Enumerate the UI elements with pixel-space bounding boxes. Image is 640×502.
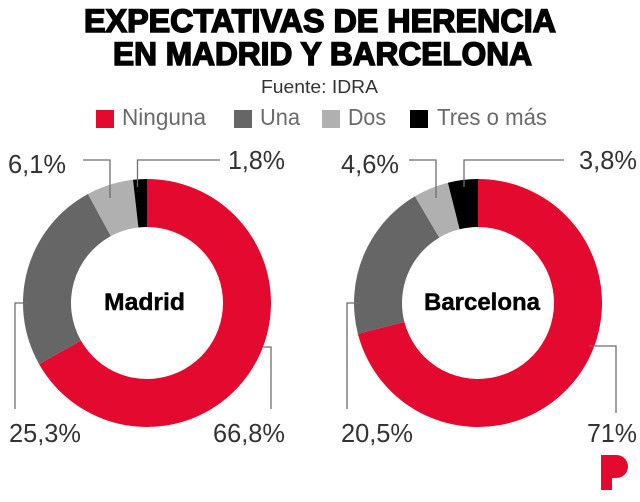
legend item: Una xyxy=(234,104,300,130)
source: Fuente: IDRA xyxy=(261,77,378,97)
legend item: Tres o más: Tres o más xyxy=(437,104,547,130)
title: EXPECTATIVAS DE HERENCIA xyxy=(84,3,556,39)
value labels: Madrid xyxy=(8,145,285,448)
segment: Una 20,5% xyxy=(354,196,439,334)
value labels: Madrid: 1,8% xyxy=(228,145,285,175)
segment: Tres o más 1,8% xyxy=(133,179,147,227)
segment: Ninguna 71% xyxy=(358,179,602,427)
segment: Ninguna 66,8% xyxy=(39,179,271,427)
legend item: Dos xyxy=(322,104,386,130)
donut chart: Madrid xyxy=(23,179,271,427)
segment: Dos 6,1% xyxy=(88,180,138,236)
legend item: Ninguna: Ninguna xyxy=(122,104,206,130)
value labels: Barcelona: 3,8% xyxy=(579,145,637,175)
value labels: Barcelona: 4,6% xyxy=(341,149,399,179)
segment: Tres o más 3,8% xyxy=(448,179,478,229)
legend item: Dos: Dos xyxy=(348,104,386,130)
value labels: Madrid: 6,1% xyxy=(8,149,66,179)
icon: publisher logo P xyxy=(601,455,628,490)
title xyxy=(84,3,556,72)
value labels: Barcelona: 20,5% xyxy=(341,418,413,448)
title: EN MADRID Y BARCELONA xyxy=(113,36,532,72)
value labels: Madrid: 25,3% xyxy=(9,418,81,448)
center label: Barcelona: Barcelona xyxy=(424,289,541,316)
leader lines xyxy=(15,160,616,413)
value labels: Barcelona: 71% xyxy=(587,418,637,448)
center label: Madrid: Madrid xyxy=(104,289,185,316)
segment: Dos 4,6% xyxy=(415,183,460,238)
segment: Una 25,3% xyxy=(23,194,111,364)
value labels: Madrid: 66,8% xyxy=(213,418,285,448)
legend item: Una: Una xyxy=(260,104,300,130)
legend xyxy=(96,104,547,130)
value labels: Barcelona xyxy=(341,145,637,448)
donut chart: Barcelona xyxy=(354,179,602,427)
